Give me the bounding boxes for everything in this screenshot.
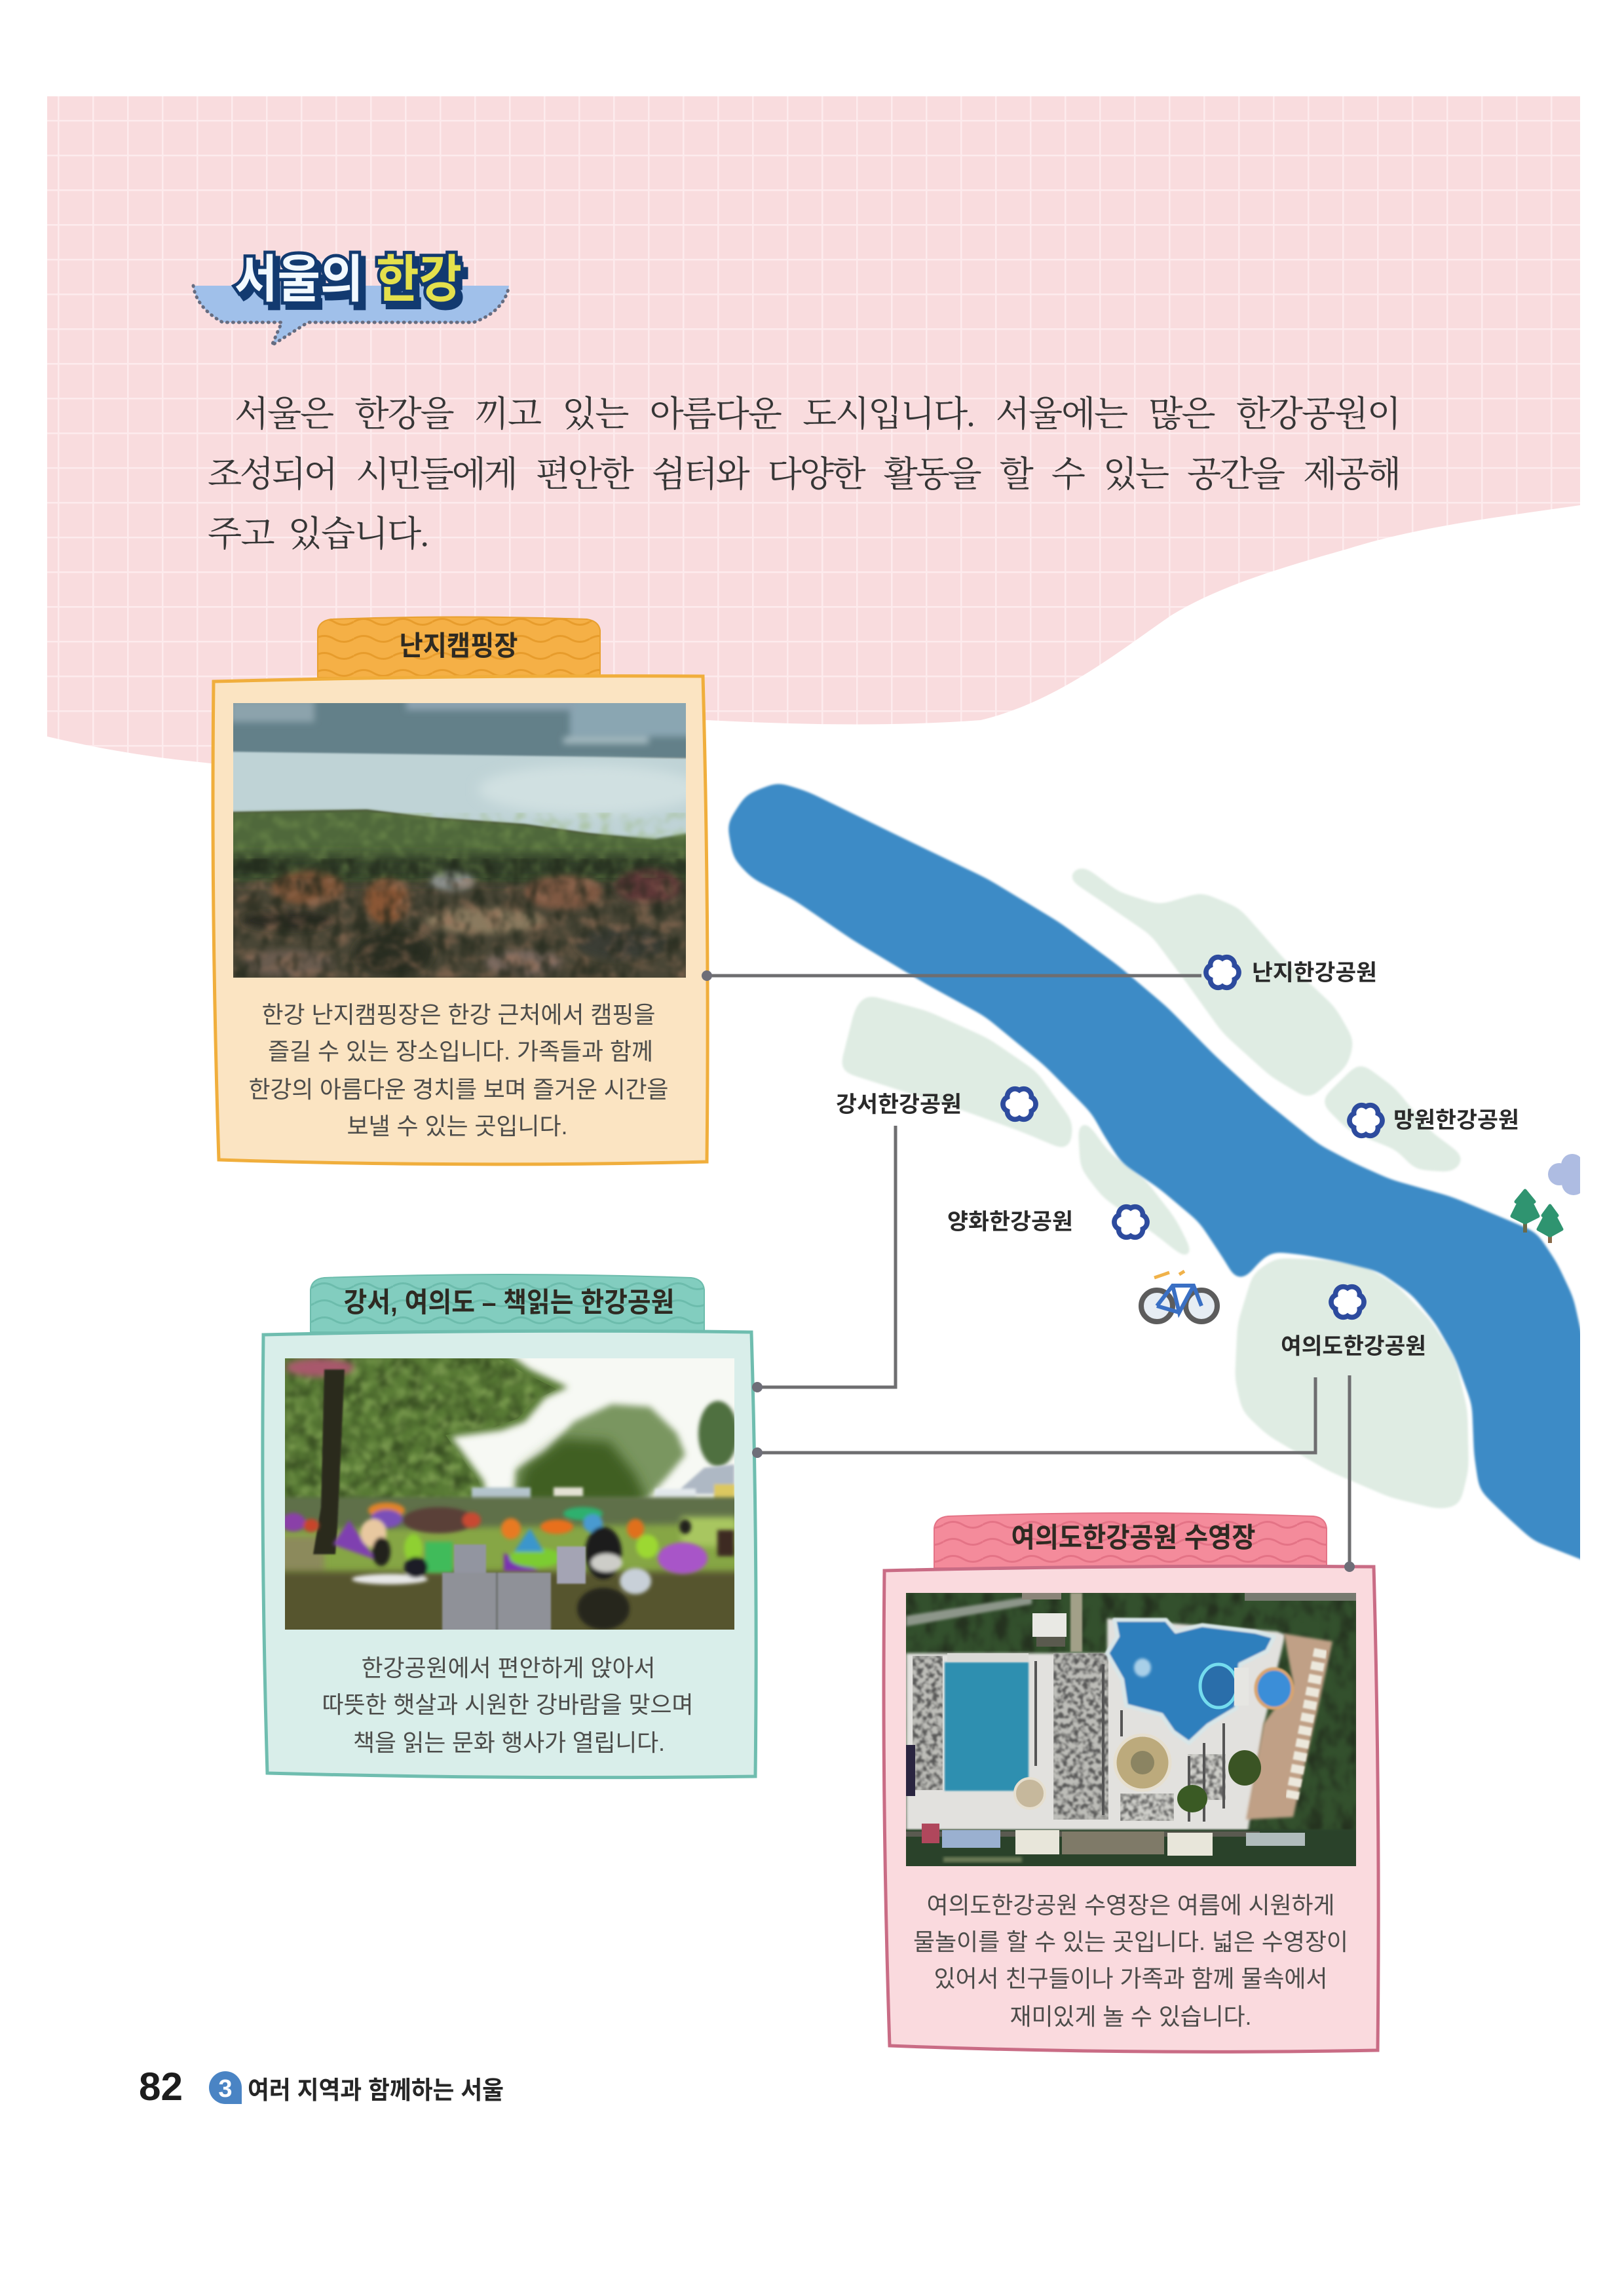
pink grid background panel	[47, 96, 1580, 767]
card text: 한강공원에서 편안하게 앉아서	[362, 1655, 655, 1681]
intro paragraph: 조성되어 시민들에게 편안한 쉼터와 다양한 활동을 할 수 있는 공간을 제공해	[208, 455, 1401, 494]
card text: 책을 읽는 문화 행사가 열립니다.	[353, 1729, 665, 1756]
park labels	[836, 961, 1519, 1359]
crowd and bean bags	[282, 1502, 734, 1630]
card text: 여의도한강공원 수영장은 여름에 시원하게	[926, 1892, 1335, 1919]
card text: 한강 난지캠핑장은 한강 근처에서 캠핑을	[262, 1001, 655, 1028]
tab: 책읽는 한강공원	[311, 1274, 704, 1332]
icon: bicycle	[1141, 1271, 1217, 1322]
grey cubes	[442, 1544, 586, 1632]
section title: 서울의 한강	[193, 250, 509, 345]
marker: 양화	[1114, 1207, 1147, 1237]
marker: 난지	[1206, 957, 1239, 987]
label: 강서: 강서한강공원	[836, 1092, 962, 1117]
card frame	[263, 1331, 756, 1778]
park: 난지	[1070, 869, 1351, 1096]
intro paragraph: 주고 있습니다.	[208, 514, 429, 554]
park: 여의도	[1237, 1261, 1466, 1506]
tab heading: 난지캠핑장	[400, 630, 518, 661]
chapter title: 여러 지역과 함께하는 서울	[248, 2077, 504, 2105]
card text	[913, 1892, 1348, 2030]
panel: 강서, 여의도 책읽는 한강공원	[263, 1274, 756, 1778]
sand deck	[1246, 1634, 1332, 1820]
trunk	[313, 1369, 345, 1554]
card text	[249, 1001, 668, 1139]
footer: page number and chapter	[139, 2065, 504, 2109]
tab heading: 여의도한강공원 수영장	[1011, 1522, 1255, 1553]
paved deck	[906, 1618, 1285, 1831]
label: 망원: 망원한강공원	[1393, 1108, 1519, 1133]
card text: 한강의 아름다운 경치를 보며 즐거운 시간을	[249, 1076, 668, 1103]
bottom strip	[901, 1829, 1359, 1870]
card frame	[213, 676, 708, 1164]
title ribbon	[193, 286, 509, 345]
label: 양화: 양화한강공원	[947, 1210, 1073, 1234]
title text: 서울의 한강	[235, 250, 462, 308]
loungers and crowd	[913, 1656, 943, 1790]
photo: Nanji campsite and river	[223, 695, 701, 978]
chapter badge	[209, 2071, 242, 2104]
rectangular pool	[945, 1662, 1029, 1791]
trees	[275, 1349, 568, 1507]
park markers	[1003, 957, 1382, 1317]
card text: 즐길 수 있는 장소입니다. 가족들과 함께	[268, 1038, 653, 1065]
map: river and parks	[730, 785, 1618, 1571]
label: 여의도: 여의도한강공원	[1281, 1334, 1426, 1359]
tab: 난지캠핑장	[318, 617, 600, 678]
connector dots	[702, 970, 1355, 1572]
card frame	[884, 1566, 1378, 2052]
card text: 보낼 수 있는 곳입니다.	[347, 1113, 567, 1139]
card text: 물놀이를 할 수 있는 곳입니다. 넓은 수영장이	[913, 1928, 1348, 1955]
tab: 수영장	[934, 1513, 1327, 1568]
photo: aerial view of the swimming pool	[901, 1593, 1359, 1870]
free-form pool	[1107, 1620, 1274, 1743]
card text	[322, 1655, 693, 1756]
label: 난지: 난지한강공원	[1252, 961, 1377, 985]
marker: 강서	[1003, 1089, 1036, 1119]
connector lines	[707, 976, 1350, 1567]
card text: 재미있게 놀 수 있습니다.	[1010, 2003, 1251, 2030]
park: 양화	[1082, 1123, 1190, 1256]
card text: 따뜻한 햇살과 시원한 강바람을 맞으며	[322, 1691, 693, 1718]
intro paragraph	[208, 394, 1401, 554]
icon: cloud	[1548, 1154, 1580, 1195]
chapter badge: 3	[218, 2075, 233, 2103]
icon: trees	[1512, 1191, 1562, 1243]
marker: 망원	[1350, 1105, 1382, 1136]
photo: people reading on bean bags	[275, 1349, 747, 1637]
panel: 여의도한강공원 수영장	[884, 1513, 1378, 2052]
white building	[1032, 1613, 1067, 1637]
page number: 82	[139, 2065, 183, 2109]
intro paragraph: 서울은 한강을 끼고 있는 아름다운 도시입니다. 서울에는 많은 한강공원이	[235, 394, 1401, 434]
river: 한강	[730, 785, 1618, 1571]
lawn	[275, 1497, 747, 1537]
panel: 난지캠핑장	[213, 617, 708, 1164]
tab heading: 강서, 여의도 – 책읽는 한강공원	[343, 1287, 675, 1318]
card text: 있어서 친구들이나 가족과 함께 물속에서	[934, 1965, 1327, 1992]
park: 망원	[1324, 1066, 1462, 1169]
park: 강서	[843, 998, 1070, 1147]
marker: 여의도	[1331, 1287, 1364, 1317]
